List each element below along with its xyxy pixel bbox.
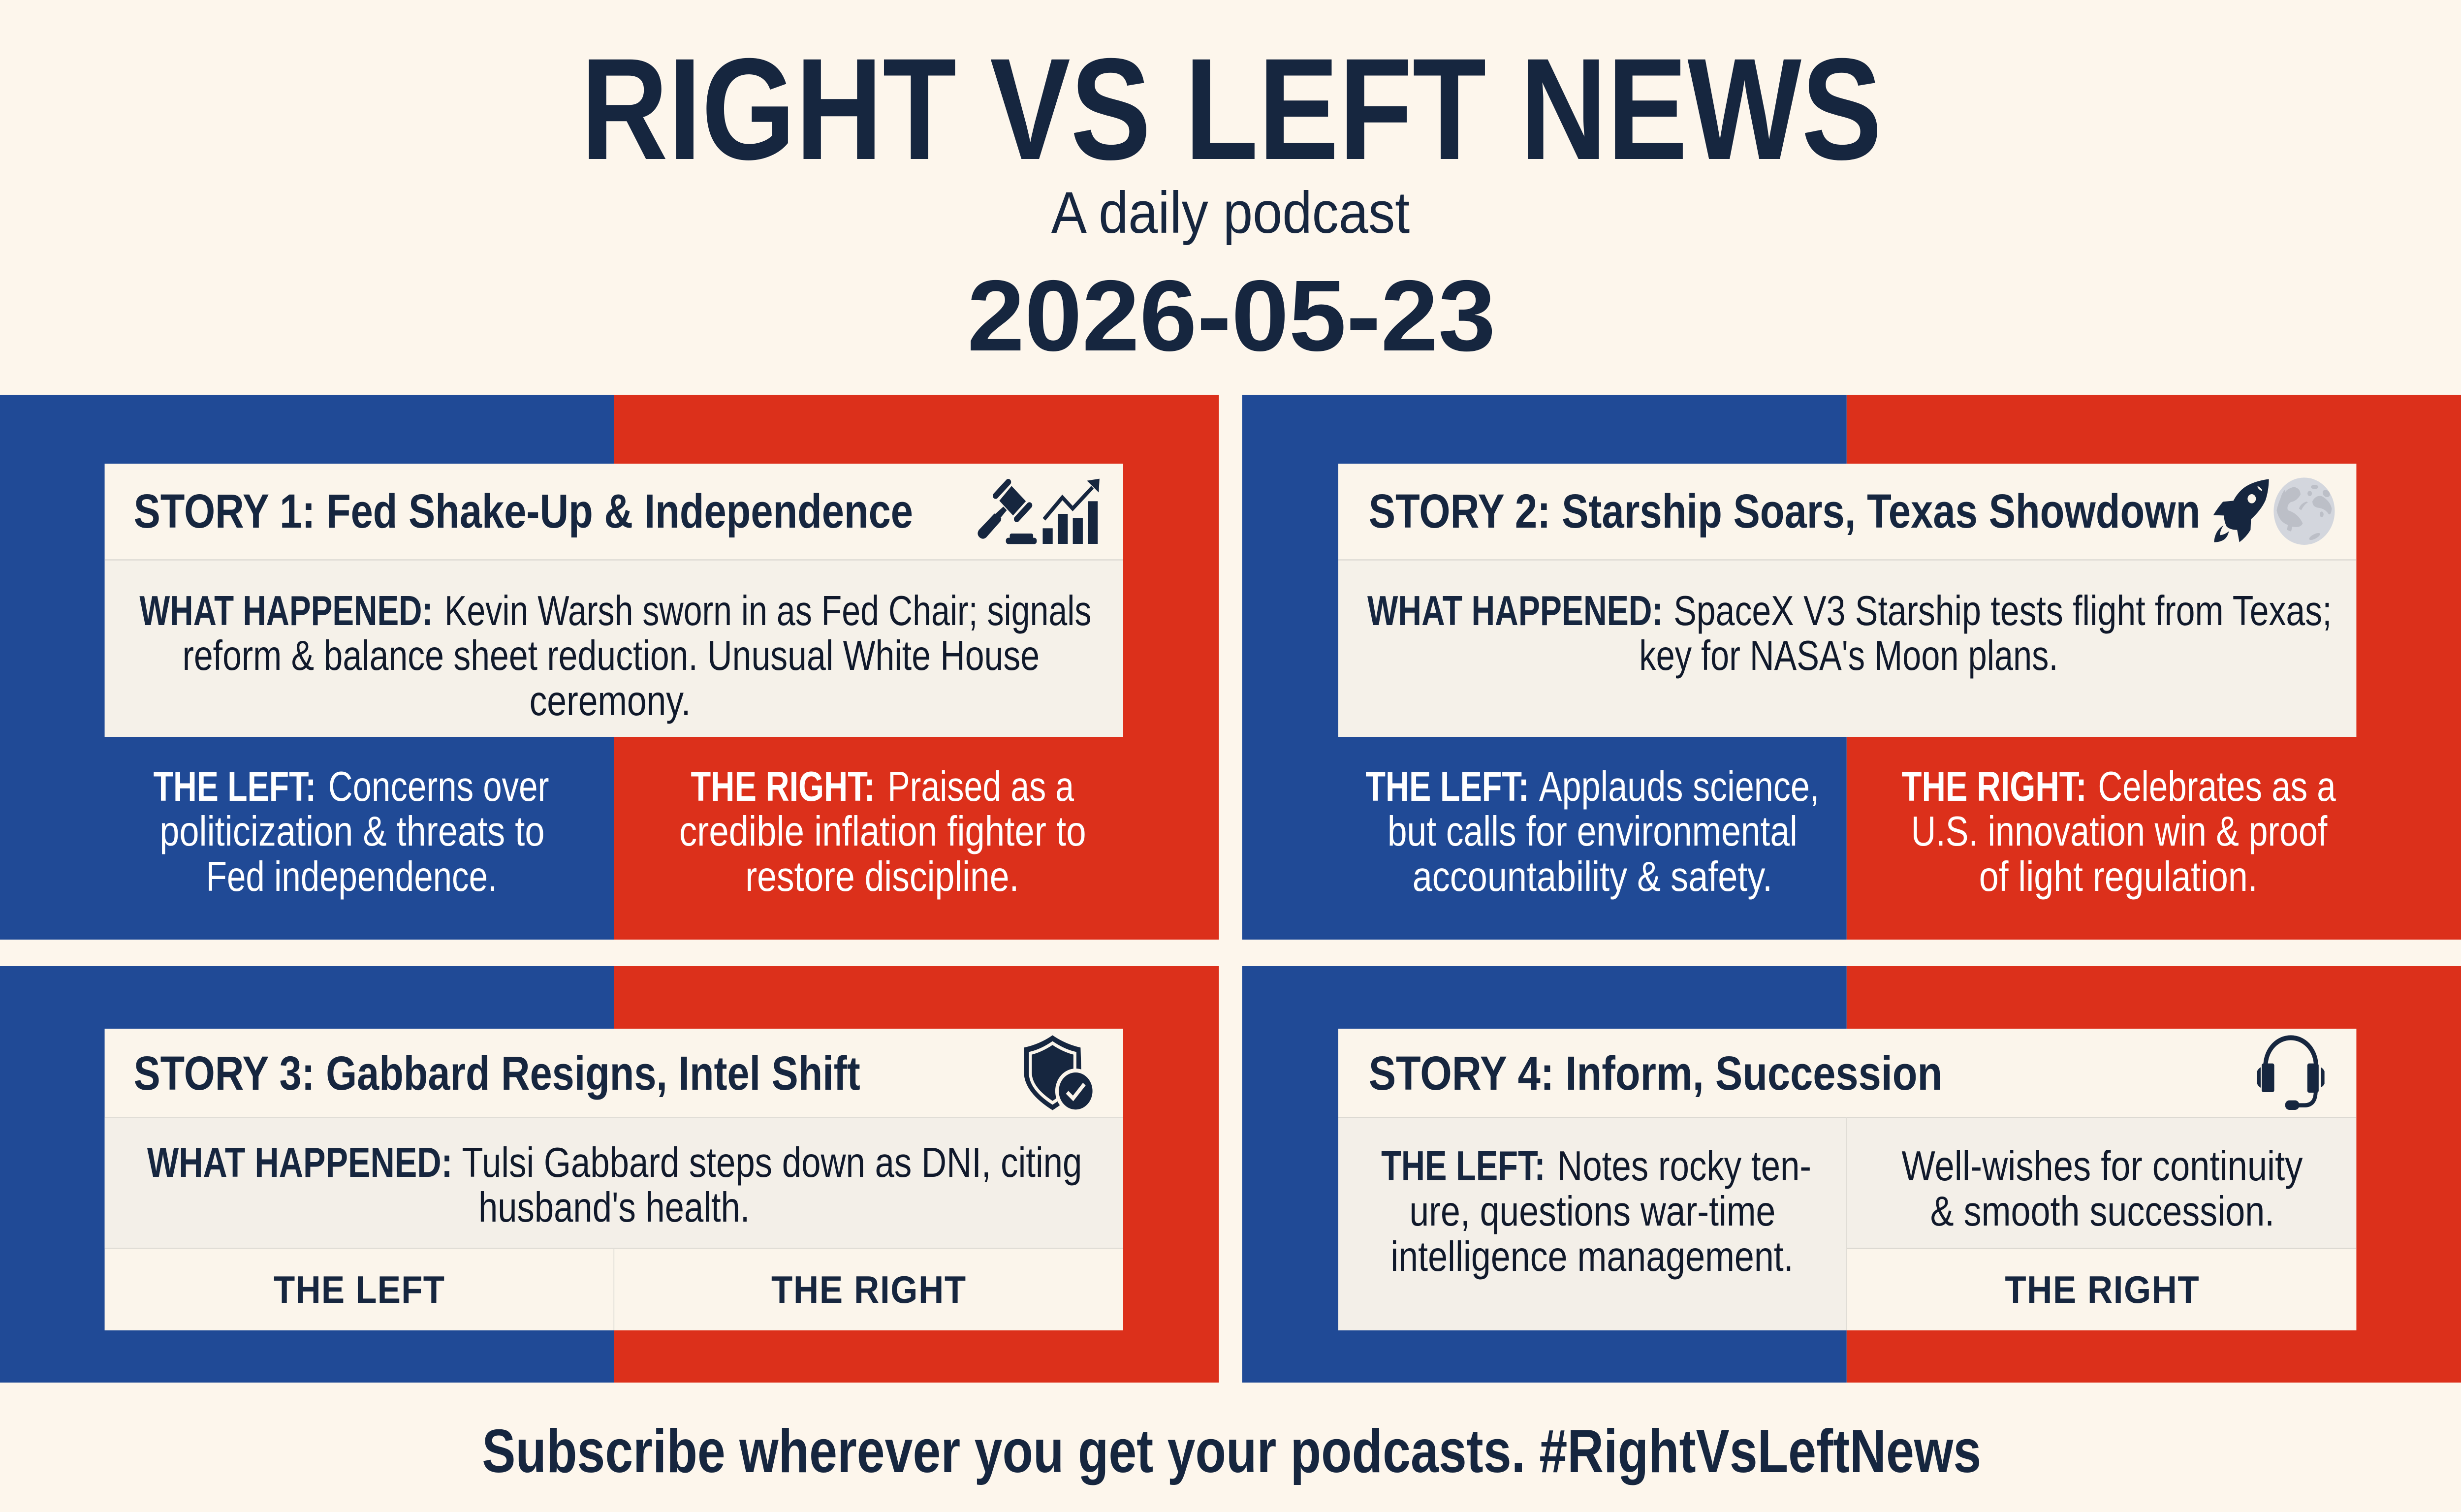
story 1 the right: Praised as a [887,763,1074,810]
story 4 heading: STORY 4: Inform, Succession [1369,1046,1942,1100]
icon: shield with check [1024,1035,1096,1113]
story 3 what happened: husband's health. [478,1184,750,1231]
icon: headset [2257,1038,2325,1110]
footer call to action: Subscribe wherever you get your podcasts. #RightVsLeftNews [482,1418,1981,1485]
story 2 what happened: key for NASA's Moon plans. [1639,632,2058,679]
panel: story 4 [1242,966,2461,1383]
story 2 heading: STORY 2: Starship Soars, Texas Showdown [1369,484,2200,538]
subtitle: A daily podcast [1051,180,1410,246]
story 2 the right: of light regulation. [1979,853,2258,900]
story 2 the right: THE RIGHT: [1902,763,2087,810]
icon: moon [2273,477,2335,545]
story 1 what happened [139,588,1091,724]
story 2 the right: Celebrates as a [2098,763,2336,810]
title: RIGHT VS LEFT NEWS [581,28,1882,190]
story 4 the left text: ure, questions war-time [1409,1188,1775,1235]
story 4 the left text [1381,1143,1811,1280]
story 3 the right label: THE RIGHT [771,1268,966,1311]
story 3 what happened: Tulsi Gabbard steps down as DNI, citing [462,1139,1082,1186]
story 4 the right text [1902,1143,2303,1235]
story 1 what happened: reform & balance sheet reduction. Unusual White House [183,632,1040,679]
story 2 what happened: SpaceX V3 Starship tests flight from Texas; [1673,588,2332,634]
story 1 heading: STORY 1: Fed Shake-Up & Independence [134,484,913,538]
story 1 the left: Concerns over [328,763,549,810]
story 1 the right: credible inflation fighter to [679,808,1086,855]
date: 2026-05-23 [967,260,1496,372]
story 2 the right: U.S. innovation win & proof [1911,808,2328,855]
story 2 the right [1902,763,2336,900]
story 4 the right label: THE RIGHT [2005,1268,2199,1311]
story 1 the right: restore discipline. [745,853,1019,900]
story 2 what happened [1367,588,2332,679]
panel: story 3 [0,966,1219,1383]
story 3 heading: STORY 3: Gabbard Resigns, Intel Shift [134,1046,860,1100]
story 4 the left text: intelligence management. [1390,1233,1794,1280]
story 3 what happened [147,1139,1082,1231]
story 2 the left: Applauds science, [1539,763,1819,810]
story 1 the left: politicization & threats to [159,808,544,855]
story 1 the left: THE LEFT: [154,763,316,810]
story 4 the left text: THE LEFT: [1381,1143,1546,1190]
story 4 the right text: Well-wishes for continuity [1902,1143,2303,1190]
story 2 the left: THE LEFT: [1365,763,1529,810]
story 1 the right [679,763,1086,900]
story 4 the right text: & smooth succession. [1930,1188,2274,1235]
story 1 what happened: WHAT HAPPENED: [139,588,433,634]
panel: story 2 [1242,395,2461,940]
story 1 the left: Fed independence. [206,853,497,900]
panel: story 1 [0,395,1219,940]
story 2 the left: accountability & safety. [1413,853,1772,900]
story 4 the left text: Notes rocky ten- [1557,1143,1811,1190]
story 3 what happened: WHAT HAPPENED: [147,1139,452,1186]
story 2 what happened: WHAT HAPPENED: [1367,588,1663,634]
icon: rocket [2213,479,2269,542]
story 1 what happened: Kevin Warsh sworn in as Fed Chair; signals [444,588,1091,634]
story 2 the left [1365,763,1819,900]
story 1 the right: THE RIGHT: [691,763,875,810]
icon: gavel and rising chart [978,479,1100,544]
story 1 what happened: ceremony. [530,678,691,724]
story 2 the left: but calls for environmental [1388,808,1798,855]
story 1 the left [154,763,549,900]
story 3 the left label: THE LEFT [274,1268,444,1311]
